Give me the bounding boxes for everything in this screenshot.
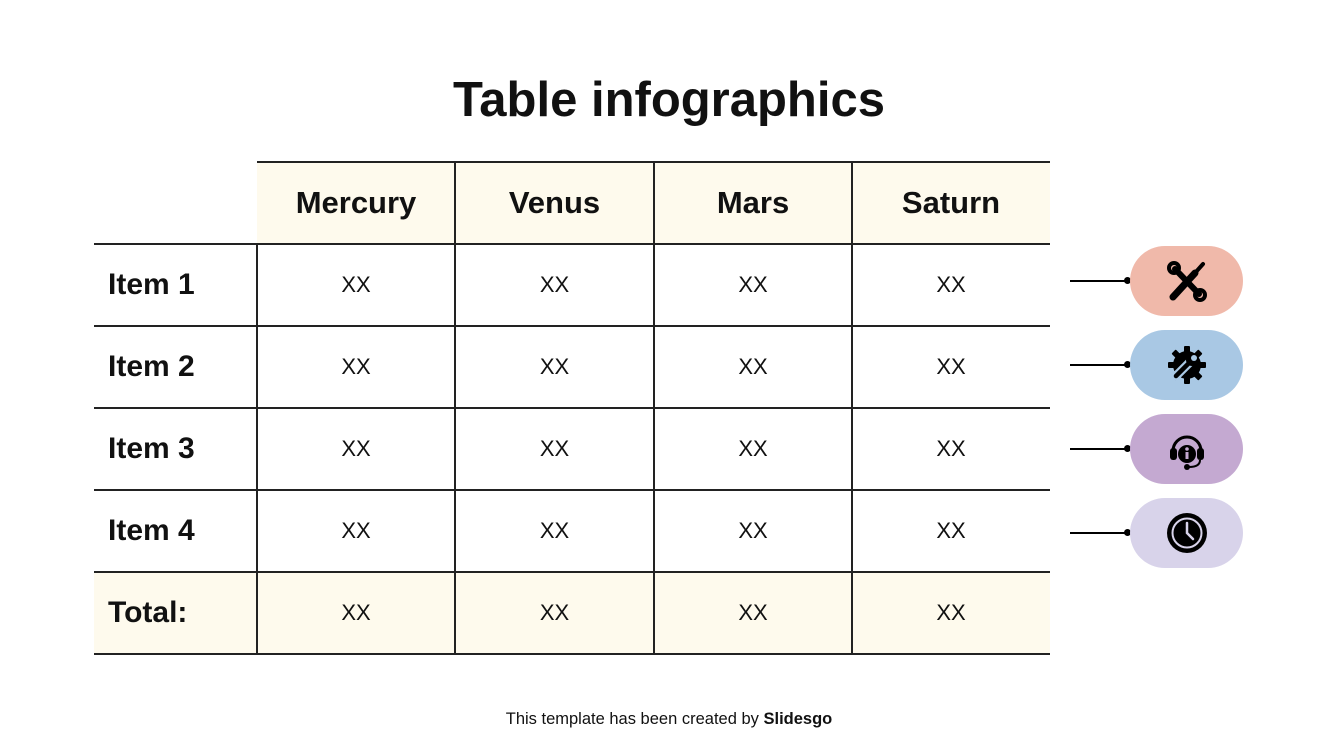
cell values: XX: [540, 518, 569, 543]
icon: clock: [1130, 498, 1243, 568]
cell values: XX: [341, 272, 371, 297]
cell values: XX: [936, 436, 966, 461]
total row background: [94, 572, 1050, 654]
cell values: XX: [738, 272, 768, 297]
footer credit: This template has been created by Slidesgo: [506, 710, 832, 728]
cell values: XX: [341, 518, 371, 543]
cell values: XX: [540, 436, 569, 461]
cell values: XX: [540, 272, 569, 297]
row labels: Item 3: [108, 432, 195, 465]
cell values: XX: [936, 600, 966, 625]
cell values: XX: [738, 354, 768, 379]
cell values: XX: [341, 600, 371, 625]
row labels: Item 2: [108, 350, 195, 383]
row labels: Total:: [108, 596, 187, 629]
row labels: Item 4: [108, 514, 195, 547]
icon: gear wrench: [1130, 330, 1243, 400]
icon: tools: [1130, 246, 1243, 316]
cell values: XX: [738, 518, 768, 543]
header background: [257, 162, 1050, 244]
row labels: [108, 268, 195, 629]
icon: headset info: [1130, 414, 1243, 484]
table: [94, 161, 1050, 655]
cell values: XX: [540, 354, 569, 379]
row labels: Item 1: [108, 268, 195, 301]
column headers: Venus: [509, 185, 600, 220]
cell values: XX: [341, 354, 371, 379]
cell values: [341, 272, 966, 625]
cell values: XX: [936, 518, 966, 543]
cell values: XX: [341, 436, 371, 461]
column headers: Mercury: [296, 185, 416, 220]
cell values: XX: [540, 600, 569, 625]
column headers: Mars: [717, 185, 789, 220]
cell values: XX: [936, 354, 966, 379]
cell values: XX: [936, 272, 966, 297]
title: Table infographics: [453, 73, 885, 127]
column headers: Saturn: [902, 185, 1000, 220]
cell values: XX: [738, 600, 768, 625]
connector lines: [1070, 277, 1130, 536]
cell values: XX: [738, 436, 768, 461]
